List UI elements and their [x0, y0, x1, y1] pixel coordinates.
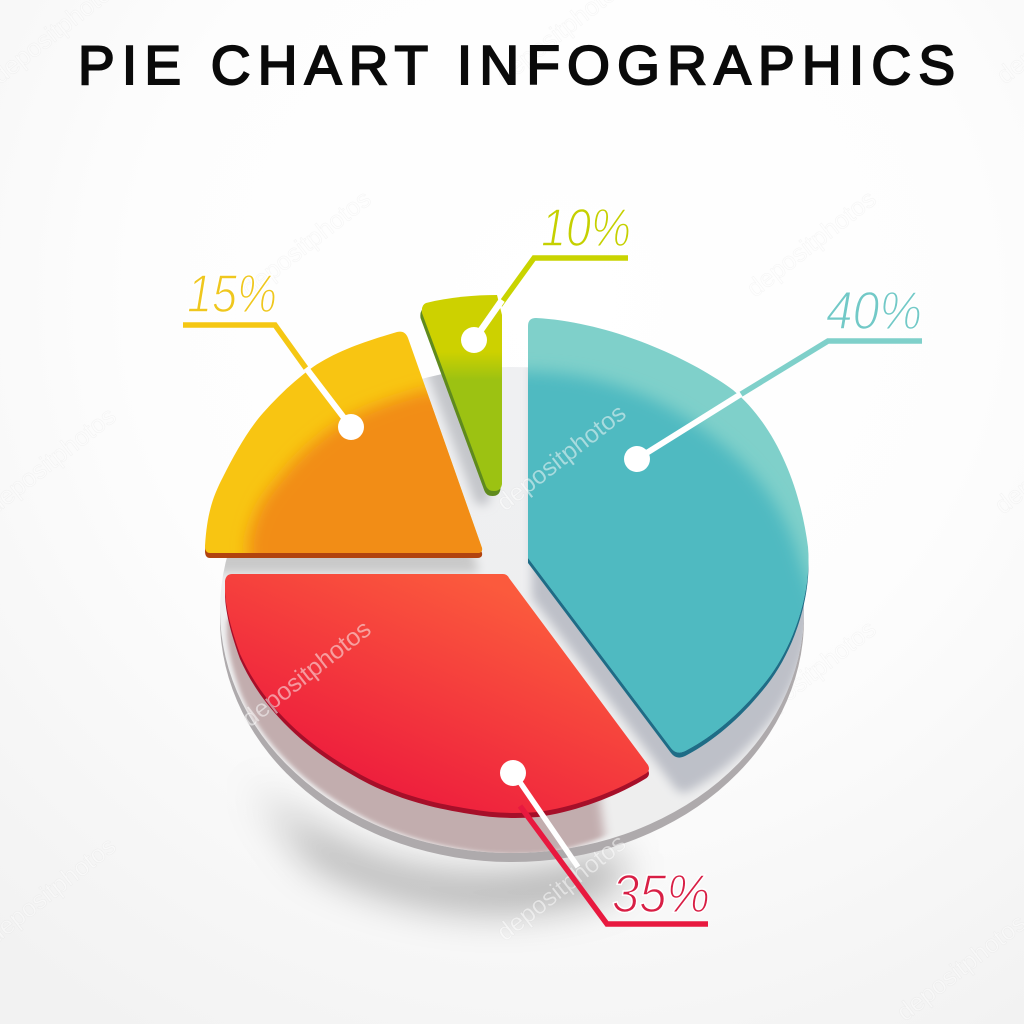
pie base disc — [220, 367, 804, 862]
callout: 40% — [624, 281, 922, 472]
watermark over the slices: depositphotos — [491, 399, 631, 517]
orange slice side — [205, 337, 482, 558]
label 35%: 35% — [612, 864, 710, 924]
slice: 40% teal — [528, 318, 808, 758]
leader line 35% — [520, 806, 708, 924]
slice: 15% orange — [205, 332, 482, 558]
teal slice inner face — [528, 364, 808, 753]
marker dot 40% — [624, 446, 650, 472]
ground shadow — [250, 780, 620, 909]
marker dot 10% — [461, 327, 487, 353]
watermark text: depositphotos — [741, 615, 881, 733]
leader line 40% — [738, 341, 922, 396]
white pointer 40% — [637, 394, 741, 459]
white pointer 10% — [474, 300, 502, 340]
label 15%: 15% — [187, 264, 277, 324]
green slice face — [422, 295, 502, 491]
watermark over the slices: depositphotos — [236, 615, 376, 733]
label 40%: 40% — [826, 281, 922, 341]
leader line 15% — [183, 325, 308, 371]
slice: 10% green — [420, 295, 502, 496]
red slice face — [225, 574, 649, 813]
teal slice rim — [528, 318, 809, 753]
leader line 10% — [500, 258, 628, 305]
red slice side — [225, 579, 649, 818]
green slice side — [420, 300, 500, 496]
watermark over the slices: depositphotos — [491, 829, 631, 947]
callout: 15% — [183, 264, 364, 440]
white pointer 15% — [306, 368, 351, 427]
slice: 35% red — [225, 574, 649, 818]
marker dot 15% — [338, 414, 364, 440]
title: PIE CHART INFOGRAPHICS — [78, 34, 955, 96]
white pointer 35% — [515, 775, 578, 867]
orange slice inner face — [240, 382, 482, 553]
watermark text: depositphotos — [236, 185, 376, 303]
teal slice side — [528, 323, 809, 758]
label 10%: 10% — [541, 198, 631, 258]
callout: 35% — [500, 760, 710, 924]
disc side wall — [220, 376, 804, 862]
disc top face — [220, 367, 804, 853]
watermark text: depositphotos — [741, 185, 881, 303]
orange slice rim — [205, 332, 482, 553]
callout: 10% — [461, 198, 631, 353]
marker dot 35% — [500, 760, 526, 786]
slice shadows on the disc — [223, 368, 804, 853]
watermark over the slices — [236, 399, 631, 947]
